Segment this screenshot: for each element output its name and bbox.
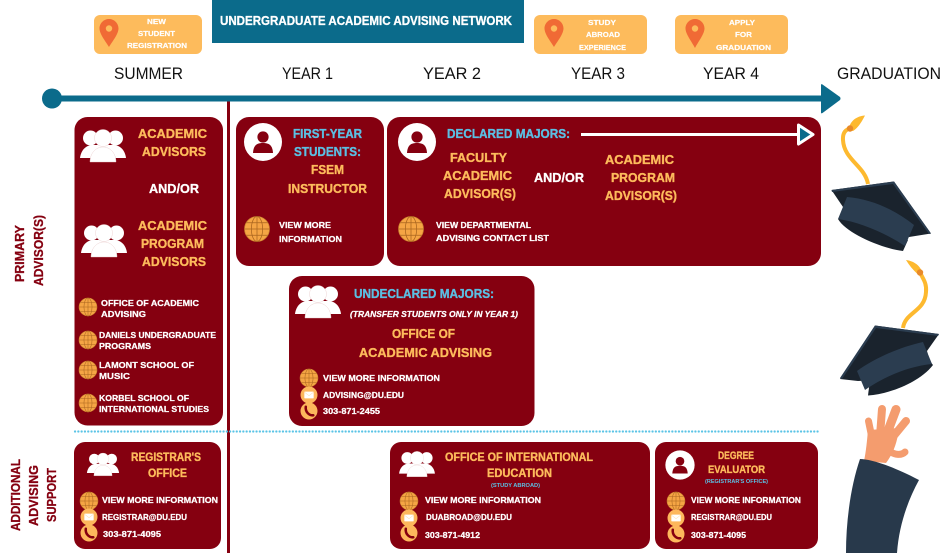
milestone: apply for graduation: [675, 15, 788, 54]
panel: undeclared majors: [289, 276, 534, 426]
milestone: study abroad experience: [534, 15, 647, 54]
heading: office of international education: [445, 452, 593, 489]
icon: academic program advisors: [81, 224, 127, 257]
dotted divider: [75, 430, 818, 433]
side label: additional advising support: ADVISING: [26, 465, 41, 526]
link: office of academic advising: ADVISING: [101, 309, 146, 319]
heading: declared majors: DECLARED MAJORS:: [447, 126, 570, 141]
advisor: academic program advisors: PROGRAM: [611, 170, 675, 185]
side label: primary advisors: PRIMARY: [12, 225, 27, 282]
icon: raised hand and sleeve: [846, 409, 919, 553]
link: departmental advising contact list: ADVISING CONTACT LIST: [436, 233, 550, 243]
heading: first-year students: STUDENTS:: [294, 144, 361, 159]
link: view more information: INFORMATION: [279, 234, 342, 244]
heading: academic advisors: ADVISORS: [142, 144, 206, 159]
advisor: academic program advisors: ADVISOR(S): [605, 188, 677, 203]
timeline labels: SUMMER: [114, 64, 183, 83]
icon: lower graduation cap: [840, 260, 939, 396]
heading: registrar's office: [131, 452, 201, 480]
panel: registrar's office: [74, 442, 221, 549]
contact list: VIEW MORE INFORMATION: [323, 373, 440, 383]
heading: undeclared majors: UNDECLARED MAJORS:: [354, 286, 494, 301]
icon: person: [244, 123, 282, 161]
side label: primary advisors: [12, 215, 46, 286]
icon: person: [398, 123, 436, 161]
heading: registrar's office: OFFICE: [148, 468, 187, 480]
contact list: [400, 492, 541, 542]
milestone: new student registration: STUDENT: [138, 29, 175, 38]
timeline labels: YEAR 4: [703, 64, 759, 83]
heading: academic program advisors: PROGRAM: [141, 236, 204, 251]
heading: academic advisors: [138, 126, 208, 159]
panel: office of international education: [390, 442, 650, 549]
link: lamont school of music: [79, 360, 194, 381]
contact list: VIEW MORE INFORMATION: [102, 495, 218, 505]
note: transfer students: (TRANSFER STUDENTS ONLY IN YEAR 1): [350, 309, 518, 319]
contact list: VIEW MORE INFORMATION: [691, 495, 801, 505]
side label: additional advising support: ADDITIONAL: [8, 459, 23, 531]
milestone: apply for graduation: FOR: [735, 30, 753, 39]
advisor: faculty academic advisors: ACADEMIC: [443, 168, 513, 183]
milestone: apply for graduation: GRADUATION: [716, 43, 771, 52]
contact list: 303-871-4095: [103, 529, 161, 539]
advisor: office of academic advising: [359, 326, 492, 360]
link: daniels undergraduate programs: DANIELS UNDERGRADUATE: [99, 330, 216, 340]
milestone: new student registration: NEW: [147, 17, 167, 26]
milestone: new student registration: REGISTRATION: [127, 41, 187, 50]
panel: summer advisors: [74, 117, 223, 426]
heading: degree evaluator: [705, 450, 768, 485]
milestone: study abroad experience: EXPERIENCE: [579, 43, 626, 52]
contact list: REGISTRAR@DU.EDU: [102, 512, 187, 522]
contact list: 303-871-4912: [425, 530, 480, 540]
contact list: 303-871-4095: [691, 530, 746, 540]
heading: academic program advisors: ACADEMIC: [138, 218, 208, 233]
side label: primary advisors: ADVISOR(S): [31, 215, 46, 286]
contact list: [300, 369, 440, 420]
link: korbel school of international studies: INTERNATIONAL STUDIES: [99, 404, 209, 414]
link: view more information: VIEW MORE: [279, 220, 331, 230]
heading: degree evaluator: EVALUATOR: [708, 464, 765, 476]
link: lamont school of music: MUSIC: [99, 371, 130, 381]
heading: degree evaluator: (REGISTRAR'S OFFICE): [705, 479, 768, 485]
heading: degree evaluator: DEGREE: [718, 450, 754, 462]
timeline labels: YEAR 1: [282, 64, 333, 83]
advisor: fsem instructor: FSEM: [311, 162, 344, 177]
contact list: REGISTRAR@DU.EDU: [691, 512, 772, 522]
timeline labels: YEAR 3: [571, 64, 625, 83]
timeline labels: YEAR 2: [423, 64, 481, 83]
title banner: [212, 0, 524, 43]
icon: upper graduation cap: [832, 116, 931, 251]
heading: office of international education: EDUCATION: [487, 468, 552, 480]
advisor: faculty academic advisors: FACULTY: [450, 150, 507, 165]
arrow: continues through year 4: [581, 125, 813, 144]
timeline arrow: [42, 84, 840, 113]
advisor: faculty academic advisors: [443, 150, 516, 201]
contact list: VIEW MORE INFORMATION: [425, 495, 541, 505]
icon: advisors: [399, 451, 435, 477]
heading: office of international education: OFFICE OF INTERNATIONAL: [445, 452, 593, 464]
heading: academic program advisors: [138, 218, 208, 269]
link: office of academic advising: [79, 298, 199, 319]
title banner: UNDERGRADUATE ACADEMIC ADVISING NETWORK: [220, 14, 512, 28]
icon: person: [665, 450, 695, 480]
heading: academic advisors: ACADEMIC: [138, 126, 208, 141]
link: daniels undergraduate programs: PROGRAMS: [99, 341, 151, 351]
contact list: ADVISING@DU.EDU: [323, 390, 404, 400]
heading: academic program advisors: ADVISORS: [142, 254, 206, 269]
link: view more information: [244, 216, 342, 244]
side label: additional advising support: SUPPORT: [44, 468, 59, 522]
and/or: AND/OR: [534, 170, 585, 185]
milestone: study abroad experience: STUDY: [588, 18, 616, 27]
link: lamont school of music: LAMONT SCHOOL OF: [99, 360, 194, 370]
panel: declared majors: [387, 117, 821, 266]
contact list: [80, 492, 218, 542]
icon: advisors: [295, 286, 341, 318]
heading: office of international education: (STUDY ABROAD): [491, 483, 540, 489]
milestone: new student registration: [94, 15, 202, 54]
panel: degree evaluator: [655, 442, 818, 549]
contact list: DUABROAD@DU.EDU: [426, 512, 512, 522]
advisor: faculty academic advisors: ADVISOR(S): [444, 186, 516, 201]
icon: advisors: [87, 453, 119, 476]
panel: first-year students: [236, 117, 384, 266]
contact list: [667, 492, 801, 542]
milestone: apply for graduation: APPLY: [729, 18, 755, 27]
icon: academic advisors: [80, 130, 126, 162]
link: daniels undergraduate programs: [79, 330, 216, 351]
advisor: office of academic advising: ACADEMIC ADVISING: [359, 345, 492, 360]
advisor: office of academic advising: OFFICE OF: [392, 326, 455, 341]
and/or: AND/OR: [149, 181, 200, 196]
timeline labels: [114, 64, 941, 83]
link: korbel school of international studies: KORBEL SCHOOL OF: [99, 393, 189, 403]
advisor: academic program advisors: [605, 152, 677, 203]
advisor: fsem instructor: [288, 162, 368, 196]
advisor: academic program advisors: ACADEMIC: [605, 152, 675, 167]
heading: registrar's office: REGISTRAR'S: [131, 452, 201, 464]
heading: first-year students: [293, 126, 363, 159]
heading: first-year students: FIRST-YEAR: [293, 126, 363, 141]
link: departmental advising contact list: [398, 216, 550, 243]
advisor: fsem instructor: INSTRUCTOR: [288, 181, 368, 196]
contact list: 303-871-2455: [323, 406, 380, 416]
divider: summer vs year 1: [227, 101, 230, 553]
link: korbel school of international studies: [79, 393, 209, 414]
side label: additional advising support: [8, 459, 59, 531]
milestone: study abroad experience: ABROAD: [586, 30, 621, 39]
link: office of academic advising: OFFICE OF ACADEMIC: [101, 298, 199, 308]
link: departmental advising contact list: VIEW DEPARTMENTAL: [436, 220, 531, 230]
